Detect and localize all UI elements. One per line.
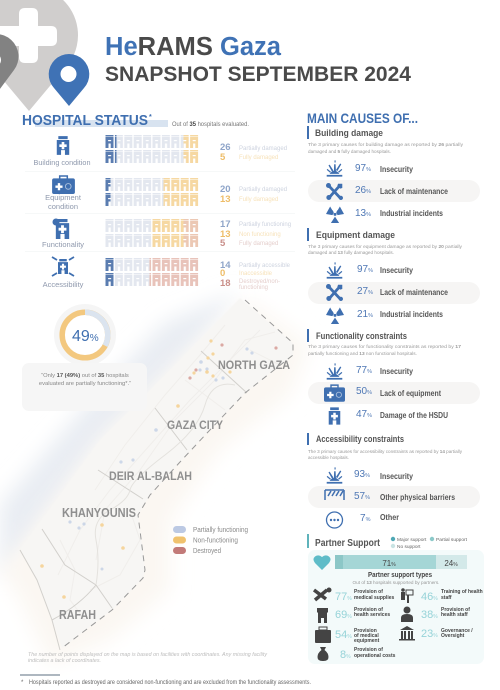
cause: insecurity: 93%	[354, 469, 370, 480]
donut chart	[62, 312, 108, 358]
heading: partner support types: Out of 13 hospitals supported by partners.	[352, 580, 440, 586]
heading: hospital status: *	[149, 114, 152, 121]
map legend: Non-functioning	[193, 538, 238, 544]
hospital points	[68, 347, 254, 570]
figures: building condition: Fully damaged	[239, 155, 278, 161]
figures: equipment condition	[220, 184, 287, 205]
panel: functionality constraints: Functionality constraints	[316, 331, 407, 342]
quote	[39, 373, 131, 387]
figures: accessibility: Inaccessible	[239, 271, 273, 277]
row: functionality	[42, 218, 291, 249]
map labels: NORTH GAZA	[218, 358, 290, 372]
figures: equipment condition: 20	[220, 184, 231, 195]
item: health services: 69%	[335, 609, 352, 621]
panel: building damage: damaged and 5 fully damaged hospitals.	[308, 149, 391, 154]
cause: damage of the HSDU	[329, 407, 448, 425]
heading: partner support: Partner Support	[315, 538, 381, 549]
label: building condition: Building condition	[34, 158, 90, 167]
item: medical equipment: equipment	[354, 638, 380, 644]
item: operational costs: Provision of	[354, 647, 383, 653]
panel: functionality constraints: partially functioning and 13 non functional hospitals.	[308, 351, 417, 356]
quote: evaluated are partially functioning*.”	[39, 381, 131, 387]
cause: insecurity: Insecurity	[380, 472, 413, 481]
map note: The number of points displayed on the map is based on facilities with coordinates. Any missing facility	[28, 652, 268, 658]
panel: functionality constraints: The 3 primary causes for functionality constraints as reported by 17	[308, 344, 461, 349]
item: governance: Oversight	[441, 633, 465, 639]
pictogram: functionality	[106, 219, 200, 232]
map labels: DEIR AL-BALAH	[109, 469, 192, 483]
item: training of health staff: staff	[441, 595, 452, 601]
cause: insecurity	[327, 160, 413, 177]
title: SNAPSHOT SEPTEMBER 2024	[105, 63, 411, 86]
figures: building condition	[220, 142, 287, 163]
heading: main causes: MAIN CAUSES OF...	[307, 111, 418, 126]
cause: other physical barriers: 57%	[354, 491, 370, 502]
label: accessibility: Accessibility	[43, 280, 84, 289]
cause: lack of maintenance: 26%	[355, 185, 371, 196]
figures: equipment condition: Partially damaged	[239, 187, 287, 193]
row: building condition	[34, 135, 287, 167]
cause: insecurity: 77%	[356, 365, 372, 376]
cause: other: 7%	[360, 513, 371, 524]
cause: lack of maintenance: 27%	[357, 286, 373, 297]
map of Gaza	[0, 292, 310, 665]
pictogram: building condition	[106, 135, 200, 148]
item: operational costs: operational costs	[354, 653, 396, 659]
item: medical equipment: 54%	[335, 629, 352, 641]
panel: functionality constraints	[307, 329, 480, 425]
heading: partner support types	[352, 572, 440, 586]
item: health staff: Provision of	[441, 607, 470, 613]
item: medical supplies: Provision of	[354, 589, 383, 595]
icon: hospital	[57, 136, 69, 155]
figures: accessibility	[220, 260, 291, 291]
figures: accessibility: Partially accessible	[239, 263, 291, 269]
item: training of health staff: 46%	[421, 591, 438, 603]
panel: equipment damage: damaged and 13 fully damaged hospitals.	[308, 250, 394, 255]
label: equipment condition: Equipment	[45, 193, 82, 202]
icon: medical case	[52, 176, 75, 194]
cause: lack of equipment: 50%	[356, 386, 372, 397]
callout: functioning share	[22, 304, 147, 411]
cause: other physical barriers	[325, 490, 455, 502]
map note	[28, 652, 268, 664]
territory	[20, 298, 293, 648]
cause: insecurity: Insecurity	[380, 367, 413, 376]
heading: partner support	[307, 534, 381, 549]
roads	[58, 325, 280, 620]
figures: functionality: Non functioning	[239, 232, 281, 238]
item: medical supplies	[314, 588, 395, 603]
map labels: GAZA CITY	[167, 418, 223, 432]
heading: hospital status: HOSPITAL STATUS	[22, 112, 148, 129]
icon: hospital with arrows	[52, 257, 74, 276]
item: medical supplies: 77%	[335, 591, 352, 603]
item: medical supplies: medical supplies	[354, 595, 395, 601]
row: equipment condition	[45, 176, 287, 211]
map labels: KHANYOUNIS	[62, 506, 136, 520]
item: governance	[399, 626, 473, 640]
map legend: Partially functioning	[193, 527, 248, 534]
figures: functionality	[220, 219, 291, 249]
cause: industrial incidents: Industrial incidents	[380, 209, 443, 218]
legend: partner support: No support	[397, 544, 421, 550]
governorate boundaries	[20, 351, 247, 650]
legend: partner support: Major support	[397, 537, 427, 543]
map note: indicates a lack of coordinates.	[28, 658, 101, 664]
footnote: *	[21, 680, 24, 686]
cause: industrial incidents: 13%	[355, 208, 371, 219]
figures: accessibility: 14	[220, 260, 231, 271]
panel: accessibility constraints	[307, 433, 480, 528]
label: equipment condition: condition	[48, 202, 78, 211]
cause: industrial incidents: Industrial incidents	[380, 310, 443, 319]
panel: equipment damage: Equipment damage	[316, 230, 395, 241]
cause: insecurity: Insecurity	[380, 165, 413, 174]
panel: accessibility constraints: The 3 primary causes for accessibility constraints as reported by 14 partially	[308, 449, 463, 454]
heading: hospital status: Out of 35 hospitals evaluated.	[172, 122, 249, 128]
map labels: RAFAH	[59, 608, 96, 622]
figures: accessibility: 0	[220, 268, 225, 279]
figures: building condition: 26	[220, 142, 231, 153]
item: medical equipment: Provision	[354, 628, 377, 634]
item: governance: Governance /	[441, 628, 473, 634]
figures: equipment condition: Fully damaged	[239, 197, 278, 203]
item: health services: Provision of	[354, 607, 383, 613]
pictogram: accessibility	[106, 258, 200, 271]
land haze	[0, 300, 310, 665]
figures: accessibility: Destroyed/non-	[239, 279, 280, 285]
figures: functionality: Fully damaged	[239, 241, 278, 247]
figures: accessibility: 18	[220, 278, 231, 289]
cause: insecurity: 97%	[355, 163, 371, 174]
map legend: Destroyed	[193, 548, 221, 555]
panel: partner support	[307, 534, 484, 664]
item: training of health staff: Training of health	[441, 589, 483, 595]
decorative map pins	[0, 0, 89, 111]
cause: industrial incidents	[326, 308, 443, 324]
cause: industrial incidents	[326, 206, 443, 223]
cause: other: Other	[380, 513, 399, 522]
stacked bar	[335, 555, 467, 569]
figures: equipment condition: 13	[220, 194, 231, 205]
cause: lack of maintenance: Lack of maintenance	[380, 187, 448, 196]
heading: hospital status	[22, 112, 249, 129]
cause: lack of maintenance	[326, 183, 448, 200]
map legend	[173, 526, 248, 555]
cause: lack of equipment	[324, 385, 441, 402]
footnote	[20, 674, 311, 686]
figures: building condition: 5	[220, 152, 226, 163]
figures: functionality: 5	[220, 238, 226, 249]
item: medical equipment	[315, 627, 380, 644]
icon: dark grey pin	[0, 34, 18, 97]
cause: insecurity: 97%	[357, 264, 373, 275]
label: functionality: Functionality	[42, 240, 84, 249]
heading: partner support types: Partner support types	[368, 572, 432, 579]
figures: functionality: Partially functioning	[239, 222, 291, 228]
item: health staff: health staff	[441, 612, 468, 618]
item: operational costs	[318, 647, 396, 661]
eastern border	[62, 300, 293, 648]
item: health services: health services	[354, 612, 390, 618]
cause: insecurity	[327, 363, 413, 380]
cause: insecurity	[327, 467, 413, 484]
donut value: 49%	[72, 328, 99, 345]
cause: lack of equipment: Lack of equipment	[380, 389, 441, 398]
figures: accessibility: functioning	[239, 285, 268, 291]
sea haze	[0, 292, 240, 575]
cause: lack of maintenance	[326, 284, 448, 301]
panel: accessibility constraints: accessible hospitals.	[308, 455, 349, 460]
panel: building damage	[307, 126, 480, 223]
item: health services	[317, 607, 390, 623]
quote: “Only 17 (49%) out of 35 hospitals	[41, 373, 129, 379]
cause: lack of maintenance: Lack of maintenance	[380, 288, 448, 297]
figures: functionality: 17	[220, 219, 231, 230]
icon: blue pin	[49, 54, 89, 106]
panel: building damage: The 3 primary causes for building damage as reported by 26 partially	[308, 142, 464, 147]
legend: partner support: Partial support	[436, 537, 468, 543]
item: governance: 23%	[421, 628, 438, 640]
stacked bar: 71%	[382, 559, 396, 568]
panel: building damage: Building damage	[315, 128, 383, 139]
panel: equipment damage	[307, 228, 480, 324]
cause: damage of the HSDU: 47%	[356, 409, 372, 420]
cause: insecurity: Insecurity	[380, 266, 413, 275]
item: training of health staff	[401, 588, 483, 603]
cause: industrial incidents: 21%	[357, 309, 373, 320]
row: accessibility	[43, 257, 291, 291]
footnote: Hospitals reported as destroyed are considered non-functioning and are excluded from the functionality assessments.	[29, 680, 311, 686]
stacked bar: 24%	[444, 559, 458, 568]
cause: damage of the HSDU: Damage of the HSDU	[380, 411, 448, 420]
title	[105, 33, 411, 86]
map labels	[59, 358, 290, 622]
icon: hospital with gear	[52, 218, 69, 239]
item: medical equipment: of medical	[354, 633, 379, 639]
cause: other physical barriers: Other physical barriers	[380, 493, 455, 502]
cause: other	[326, 512, 399, 528]
legend: partner support	[391, 537, 468, 550]
pictogram: equipment condition	[106, 178, 200, 191]
figures: functionality: 13	[220, 229, 231, 240]
item: operational costs: 8%	[340, 649, 351, 661]
panel: hospital status	[22, 112, 295, 291]
icon: large grey pin with cross	[0, 0, 78, 111]
item: health staff: 38%	[421, 609, 438, 621]
cause: insecurity	[327, 262, 413, 279]
figures: building condition: Partially damaged	[239, 146, 287, 152]
title: HeRAMS Gaza	[105, 33, 282, 61]
panel: equipment damage: The 3 primary causes for equipment damage as reported by 20 partially	[308, 244, 463, 249]
label: equipment condition	[45, 193, 82, 211]
panel: accessibility constraints: Accessibility constraints	[316, 434, 404, 445]
icon: handshake heart	[314, 555, 330, 570]
item: health staff	[401, 606, 470, 622]
